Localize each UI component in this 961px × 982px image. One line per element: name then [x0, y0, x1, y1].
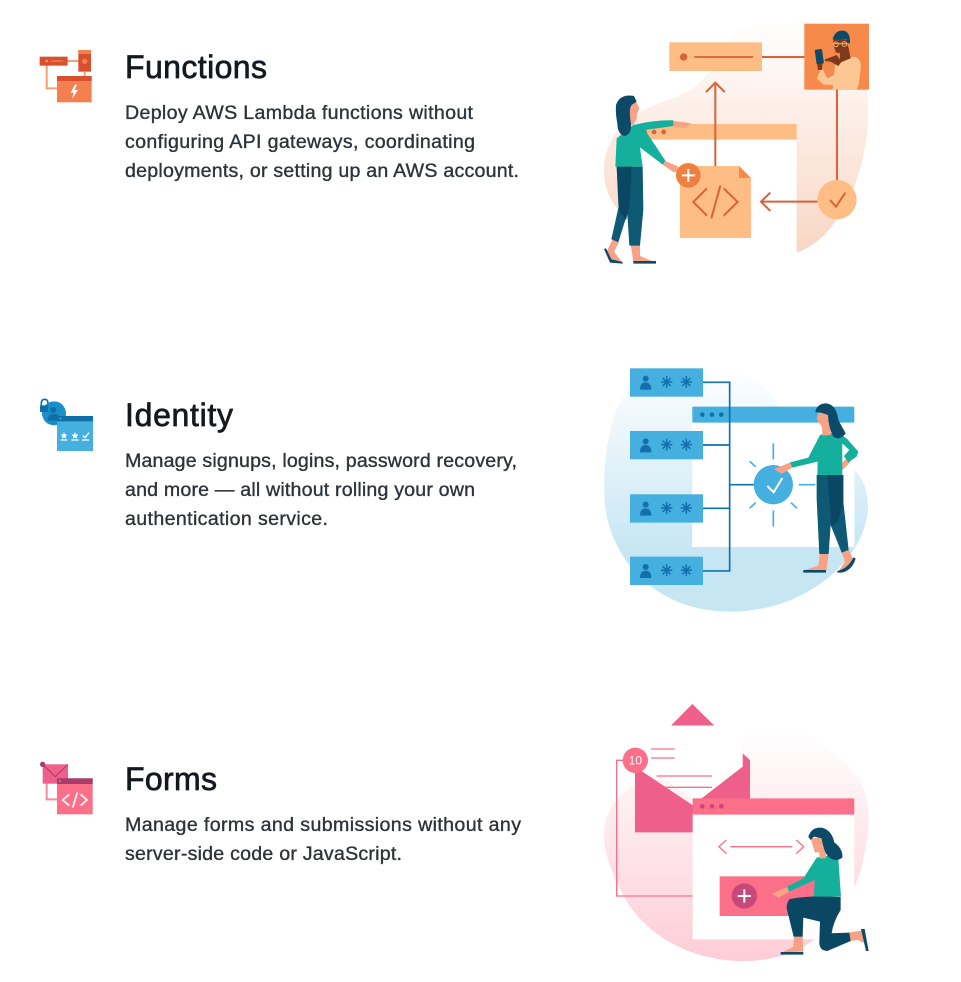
connectors — [703, 382, 755, 571]
text: Functions description: configuring API gateways, coordinating — [125, 131, 475, 153]
input bar — [669, 42, 762, 71]
section: Identity — [40, 367, 868, 612]
icon: functions — [40, 50, 92, 102]
plus badge — [676, 163, 701, 188]
illustration: functions — [604, 20, 869, 264]
check circle — [817, 180, 857, 219]
woman — [772, 828, 869, 955]
text: Functions description — [125, 102, 519, 182]
text: Identity description: Manage signups, logins, password recovery, — [125, 450, 517, 472]
count badge — [623, 748, 648, 773]
text: Forms description: Manage forms and submissions without any — [125, 814, 521, 836]
illustration: forms — [604, 704, 869, 961]
text: Forms description — [125, 814, 521, 865]
woman — [604, 95, 692, 264]
check badge with rays — [750, 443, 815, 526]
background blob — [604, 367, 868, 612]
text: Identity description — [125, 450, 517, 530]
text: Functions description: deployments, or setting up an AWS account. — [125, 160, 519, 182]
section: Functions — [40, 20, 869, 264]
connectors — [706, 57, 837, 211]
background blob — [604, 727, 869, 961]
woman — [774, 403, 858, 573]
icon: identity — [40, 399, 93, 451]
text: Functions description: Deploy AWS Lambda functions without — [125, 102, 474, 124]
icon: forms — [40, 762, 93, 814]
connector — [617, 760, 697, 896]
input field arrows — [719, 840, 804, 854]
code file — [680, 166, 751, 238]
window — [637, 124, 797, 254]
add button — [720, 876, 823, 916]
illustration: identity — [604, 367, 868, 612]
text: Forms description: server-side code or JavaScript. — [125, 843, 402, 865]
background blob — [604, 20, 868, 253]
window — [693, 798, 854, 939]
photo: person with phone — [804, 24, 869, 90]
envelope — [635, 704, 750, 832]
text: Identity description: authentication service. — [125, 508, 328, 530]
heading: Forms: Forms — [125, 761, 217, 797]
credential rows — [630, 368, 703, 585]
heading: Functions: Functions — [125, 49, 267, 85]
window — [692, 407, 854, 547]
text: Identity description: and more — all without rolling your own — [125, 479, 475, 501]
heading: Identity: Identity — [125, 397, 233, 433]
count badge: 10 — [629, 754, 642, 768]
section: Forms — [40, 704, 869, 961]
